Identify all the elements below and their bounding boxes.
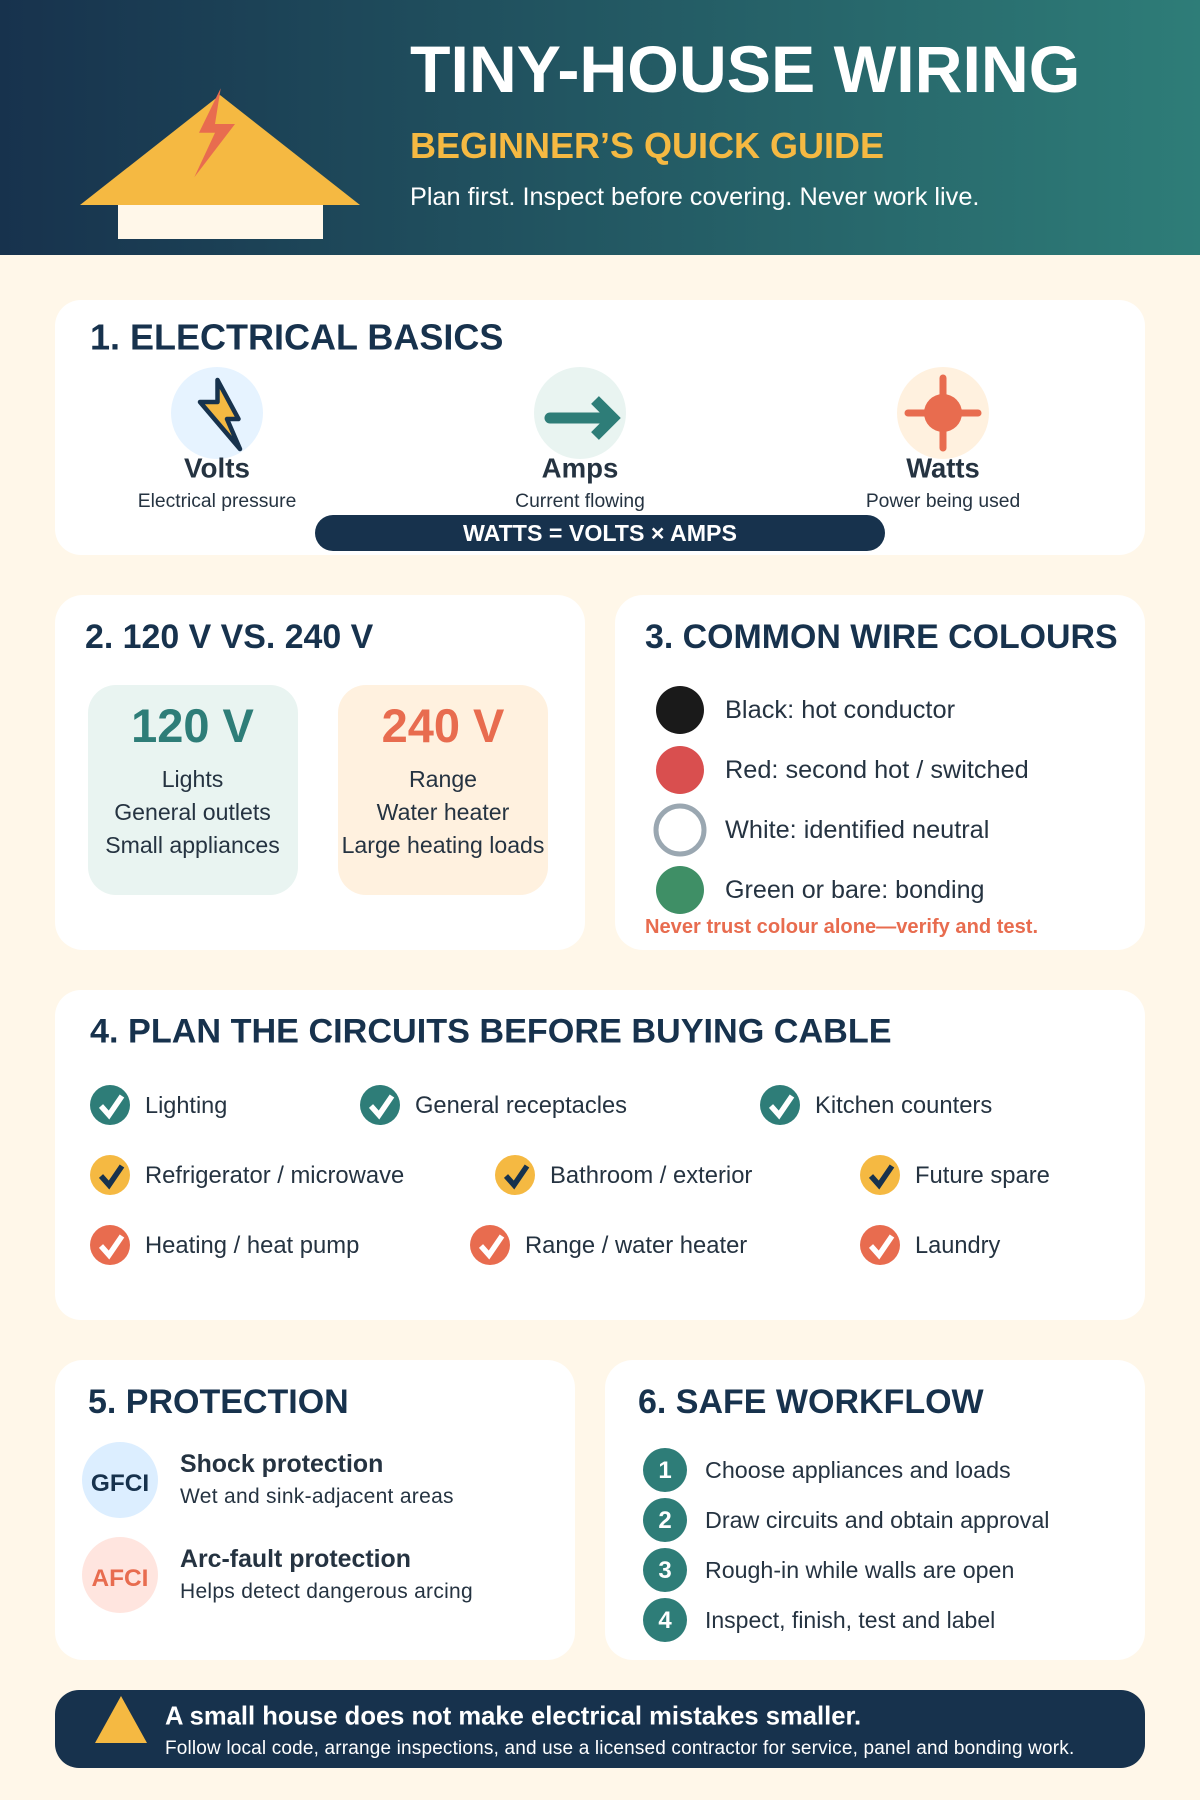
card: 120 v: General outlets [114, 799, 271, 825]
label: volts: Electrical pressure [138, 491, 296, 512]
wire: black [656, 686, 956, 734]
label: watts [866, 452, 1020, 512]
panel: safe workflow [605, 1360, 1145, 1660]
item: watts [897, 367, 989, 459]
item: gfci: Wet and sink-adjacent areas [180, 1485, 454, 1508]
heading: 120 v vs 240 v: 2. 120 V VS. 240 V [85, 618, 374, 656]
checklist item: heating: Heating / heat pump [145, 1232, 359, 1259]
checklist item: refrigerator: Refrigerator / microwave [145, 1162, 404, 1189]
label: amps: Amps [542, 452, 618, 484]
wire: white: White: identified neutral [725, 816, 989, 844]
panel: 120 v vs 240 v [55, 595, 585, 950]
checklist item: future spare [860, 1155, 1050, 1195]
icon: warning triangle [95, 1696, 147, 1743]
step 2: 2 [658, 1507, 672, 1534]
panel: plan the circuits [55, 990, 1145, 1320]
checklist item: kitchen counters [760, 1085, 992, 1125]
checklist item: laundry [860, 1225, 1000, 1265]
warning note: Never trust colour alone—verify and test. [645, 916, 1038, 938]
item: gfci: GFCI [91, 1470, 149, 1497]
checklist item: lighting: Lighting [145, 1092, 227, 1118]
checklist item: bathroom [495, 1155, 752, 1195]
label: volts [138, 452, 296, 512]
checklist item: lighting [90, 1085, 227, 1125]
checklist item: general receptacles [360, 1085, 627, 1125]
label: watts: Watts [906, 452, 980, 484]
wire: white [656, 806, 989, 854]
checklist item: bathroom: Bathroom / exterior [550, 1162, 752, 1189]
panel: electrical basics [55, 300, 1145, 555]
footer headline: A small house does not make electrical mistakes smaller. [165, 1702, 861, 1730]
tagline: Plan first. Inspect before covering. Never work live. [410, 183, 979, 211]
formula pill: WATTS = VOLTS × AMPS [463, 520, 737, 546]
icon: bolt [200, 380, 240, 449]
checklist item: range [470, 1225, 747, 1265]
subtitle: BEGINNER’S QUICK GUIDE [410, 125, 884, 166]
step 3: Rough-in while walls are open [705, 1557, 1014, 1583]
checklist item: kitchen counters: Kitchen counters [815, 1092, 992, 1119]
checklist item: refrigerator [90, 1155, 404, 1195]
step 4: Inspect, finish, test and label [705, 1607, 995, 1633]
checklist item: general receptacles: General receptacles [415, 1093, 627, 1119]
card: 120 v: 120 V [131, 699, 255, 752]
item: afci [82, 1537, 473, 1613]
heading: plan the circuits: 4. PLAN THE CIRCUITS BEFORE BUYING CABLE [90, 1012, 892, 1050]
card: 240 v: Range [409, 766, 477, 792]
step 1: Choose appliances and loads [705, 1457, 1011, 1483]
step 2 [643, 1498, 1049, 1542]
card: 120 v [88, 685, 298, 895]
card: 240 v [338, 685, 548, 895]
icon: light [908, 378, 978, 448]
wire: black: Black: hot conductor [725, 696, 956, 724]
step 3 [643, 1548, 1014, 1592]
item: afci: Arc-fault protection [180, 1545, 411, 1573]
item: volts [171, 367, 263, 459]
panel: common wire colours [615, 595, 1145, 950]
footer banner [55, 1690, 1145, 1768]
step 4 [643, 1598, 995, 1642]
checklist item: range: Range / water heater [525, 1232, 747, 1259]
heading: protection: 5. PROTECTION [88, 1383, 349, 1421]
step 3: 3 [658, 1557, 672, 1584]
step 1: 1 [658, 1457, 672, 1484]
heading: electrical basics: 1. ELECTRICAL BASICS [90, 316, 503, 358]
step 2: Draw circuits and obtain approval [705, 1507, 1049, 1533]
wire: green: Green or bare: bonding [725, 876, 984, 904]
item: amps [534, 367, 626, 459]
card: 240 v: Large heating loads [342, 832, 544, 858]
wire: red: Red: second hot / switched [725, 756, 1029, 784]
item: afci: AFCI [92, 1565, 148, 1592]
title: TINY-HOUSE WIRING [410, 33, 1080, 107]
label: amps [515, 452, 645, 512]
step 1 [643, 1448, 1011, 1492]
wire: green [656, 866, 984, 914]
header banner [0, 0, 1200, 255]
checklist item: heating [90, 1225, 359, 1265]
card: 240 v: 240 V [382, 699, 505, 752]
label: watts: Power being used [866, 491, 1020, 512]
checklist item: laundry: Laundry [915, 1233, 1000, 1259]
icon: house with lightning bolt [80, 88, 360, 239]
panel: protection [55, 1360, 575, 1660]
footer note: Follow local code, arrange inspections, and use a licensed contractor for service, panel and bonding work. [165, 1738, 1074, 1759]
heading: safe workflow: 6. SAFE WORKFLOW [638, 1383, 985, 1421]
item: gfci [82, 1442, 454, 1518]
step 4: 4 [658, 1607, 672, 1634]
checklist item: future spare: Future spare [915, 1162, 1050, 1189]
icon: arrow [550, 400, 613, 436]
card: 240 v: Water heater [377, 799, 510, 825]
item: gfci: Shock protection [180, 1450, 383, 1478]
item: afci: Helps detect dangerous arcing [180, 1580, 473, 1603]
label: amps: Current flowing [515, 491, 645, 512]
label: volts: Volts [184, 452, 250, 484]
card: 120 v: Small appliances [105, 832, 280, 858]
formula pill [315, 515, 885, 551]
heading: common wire colours: 3. COMMON WIRE COLOURS [645, 618, 1118, 656]
wire: red [656, 746, 1029, 794]
card: 120 v: Lights [162, 766, 223, 792]
